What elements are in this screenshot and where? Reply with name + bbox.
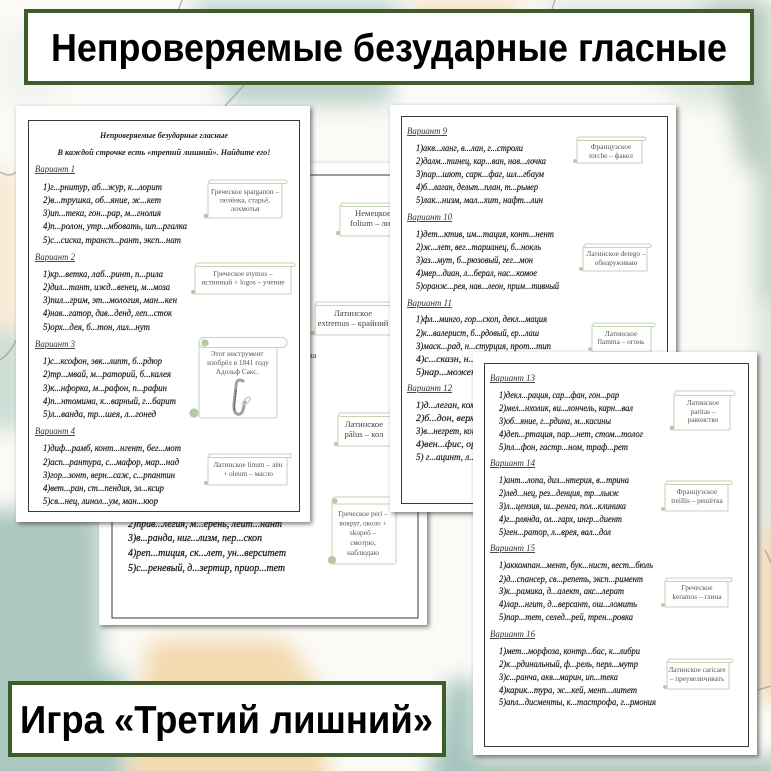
variant 1: 1)г...рнитур, аб...жур, к...лорит	[43, 182, 162, 192]
variant 15: 4)лар...нгит, д...версант, ош...ломить	[499, 599, 637, 609]
variant 11: 3)маск...рад, н...стурция, прот...тип	[415, 341, 551, 351]
callout: caricare: – преувеличивать	[669, 674, 725, 683]
variant 9: 1)акв...ланг, в...лан, г...строли	[416, 143, 523, 153]
callout: etymos	[191, 263, 295, 294]
variant 3: 5)л...ванда, тр...шея, л...гонед	[43, 409, 156, 419]
variant 2: 5)орх...дея, б...тон, лил...нут	[43, 322, 150, 332]
variant 3: 3)к...нфорка, м...рафон, п...рафин	[42, 383, 167, 393]
variant 10: Вариант 10	[407, 212, 452, 222]
variant 15: 1)аккомпан...мент, бук...нист, вест...бюль	[499, 560, 653, 570]
variant 1	[35, 164, 187, 245]
variant 16: Вариант 16	[490, 629, 535, 639]
callout: extremus: Латинское	[334, 308, 372, 318]
variant 15: 2)д...спансер, св...репеть, эксп...римент	[499, 574, 643, 584]
variant 12: 1)д...леган, ком	[416, 400, 476, 410]
variant 12: 4)вен...фис, ор	[416, 439, 476, 449]
callout: saxophone: Этот инструмент	[211, 349, 264, 358]
variant 13: 2)мел...нхолик, ви...лончель, карн...вал	[499, 403, 633, 413]
callout: treillis: Французское	[677, 487, 717, 496]
variant 16: 1)мет...морфоза, контр...бас, к...либри	[499, 646, 640, 656]
callout: peri: вокруг, около +	[339, 518, 387, 528]
exercise lines	[127, 518, 286, 574]
callout: flamma: Латинское	[605, 329, 637, 338]
callout: treillis	[661, 481, 732, 511]
title text: Непроверяемые безударные гласные	[51, 27, 727, 70]
variant 10: 3)аз...мут, б...рюзовый, гег...мон	[415, 255, 533, 265]
variant 2: 3)пил...грим, эт...мология, ман...кен	[42, 295, 177, 305]
worksheet title: Непроверяемые безударные гласные	[99, 130, 228, 140]
callout: keramos: Греческое	[682, 583, 712, 592]
variant 3: 4)п...нтомима, к...варный, г...барит	[43, 396, 176, 406]
variant 14	[490, 458, 629, 537]
panel: worksheet page 3	[390, 105, 676, 512]
variant 2	[35, 252, 177, 332]
game name banner	[10, 683, 444, 755]
variant 16: 3)с...ранча, акв...марин, ип...тека	[498, 672, 618, 682]
variant 4: 4)вет...ран, ст...пендия, эл...ксир	[43, 483, 164, 493]
variant 9: 5)лак...низм, мал...хит, нафт...лин	[416, 195, 543, 205]
variant 1: 3)ип...тека, гон...рар, м...гнолия	[42, 208, 161, 218]
variant 11: 1)фл...минго, гор...скоп, декл...мация	[416, 314, 547, 324]
variant 12: 5) г...ацинт, л...	[416, 452, 476, 462]
callout: extremus	[311, 302, 396, 335]
variant 11: Вариант 11	[407, 298, 452, 308]
variant 3: 1)с...ксофон, эвк...липт, б...рдюр	[43, 356, 162, 366]
callout: caricare	[663, 659, 733, 689]
variant 12: 2)б...дон, верм	[416, 413, 476, 423]
callout: detego	[579, 244, 651, 271]
callout: caricare: Латинское caricare	[668, 665, 726, 674]
callout: peri: skopeō –	[350, 528, 376, 537]
variant 11: 4)с...сказн, н...	[416, 354, 476, 364]
variant 2: 1)кр...ветка, лаб...ринт, п...рила	[43, 269, 163, 279]
variant 3: Вариант 3	[35, 339, 75, 349]
callout: sparganon: лохмотья	[231, 204, 260, 213]
exercise lines: 4)реп...тиция, ск...лет, ун...верситет	[128, 547, 286, 559]
panel: worksheet page 1	[16, 106, 310, 522]
variant 3	[35, 339, 176, 419]
callout: etymos: истинный + logos – учение	[201, 278, 285, 286]
callout: keramos	[661, 578, 732, 607]
variant 14: 4)г...рлянда, ол...гарх, ингр...диент	[499, 514, 622, 524]
variant 15: 5)пар...тет, селед...рей, трен...ровка	[499, 612, 633, 622]
callout: keramos: keramos – глина	[672, 592, 722, 601]
variant 2: 4)нав...гатор, див...денд, леп...сток	[43, 308, 173, 318]
variant 13: 1)декл...рация, сар...фан, гон...рар	[499, 390, 619, 400]
callout: palus	[334, 413, 394, 446]
callout: detego: обнаруживаю	[595, 258, 638, 267]
variant 2: Вариант 2	[35, 252, 75, 262]
variant 16	[490, 629, 656, 707]
variant 10	[407, 212, 559, 291]
variant 15	[490, 543, 653, 622]
callout: folium: folium – лист	[350, 218, 398, 228]
callout: linum: + oleum – масло	[223, 469, 273, 478]
variant 2: 2)дил...тант, ижд...венец, м...моза	[43, 282, 170, 292]
callout: torche: torche – факел	[589, 151, 633, 160]
callout: sparganon: Греческое sparganon –	[211, 187, 279, 196]
variant 13: Вариант 13	[490, 373, 535, 383]
variant 9: 4)б...лаган, дельт...план, т...рьмер	[416, 182, 538, 192]
callout: paritas: Латинское	[687, 398, 719, 407]
text fragment: ма	[307, 350, 317, 360]
callout: etymos: Греческое etymos –	[213, 269, 273, 278]
callout: palus: pālus – кол	[345, 429, 384, 439]
callout: linum	[204, 454, 291, 485]
panel: worksheet page 4	[473, 352, 757, 755]
variant 15: Вариант 15	[490, 543, 535, 553]
worksheet instruction: В каждой строчке есть «третий лишний». Найдите его!	[57, 147, 270, 157]
panel: worksheet page behind	[99, 163, 427, 625]
variant 14: 1)ант...лопа, диз...нтерия, в...трина	[499, 475, 629, 485]
variant 4: 1)диф...рамб, конт...нгент, бег...мот	[43, 443, 181, 453]
callout: saxophone: Адольф Сакс.	[216, 367, 258, 376]
callout: linum: Латинское linum – лён	[213, 460, 283, 469]
callout: paritas: paritas –	[691, 407, 716, 416]
variant 13: 3)об...яние, г...рдина, м...касины	[498, 416, 611, 426]
variant 3: 2)тр...мвай, м...раторий, б...калея	[43, 369, 171, 379]
variant 14: 3)л...цензия, ш...ренга, пол...клиника	[498, 501, 626, 511]
variant 13: 5)пл...фон, гастр...ном, траф...рет	[499, 442, 628, 452]
callout: flamma	[588, 323, 655, 352]
variant 16: 4)карик...тура, ж...кей, менп...литет	[499, 685, 637, 695]
variant 13	[490, 373, 643, 452]
variant 16: 5)апл...дисменты, к...тастрофа, г...рмония	[499, 697, 656, 707]
variant 9: 2)далм...тинец, кар...ван, нав...лочка	[416, 156, 546, 166]
variant 12: 3)в...негрет, кон	[415, 426, 476, 436]
variant 11: 2)к...валерист, б...рдовый, ер...лаш	[416, 328, 539, 338]
callout: treillis: treillis – решётка	[671, 496, 724, 505]
variant 10: 5)оранж...рея, нав...леон, прим...тивный	[416, 281, 559, 291]
exercise lines: 3)в...ранда, ниг...лизм, пер...скоп	[127, 532, 262, 544]
callout: extremus: extremus – крайний	[318, 318, 389, 328]
variant 1: 4)п...ролон, утр...мбовать, шп...ргалка	[43, 221, 187, 231]
variant 13: 4)деп...ртация, пар...нет, стом...толог	[499, 429, 643, 439]
title banner	[26, 11, 752, 83]
callout: sparganon: пелёнка, старьё,	[220, 196, 270, 204]
variant 10: 2)ж...лет, вег...тарианец, б...нокль	[416, 242, 541, 252]
callout: peri: Греческое peri –	[338, 509, 388, 518]
variant 9: 3)пар...шют, сарк...фаг, шл...гбаум	[415, 169, 544, 179]
callout: sparganon	[204, 180, 287, 218]
variant 15: 3)к...рамика, д...алект, акс...лерат	[498, 586, 624, 596]
variant 14: 5)ген...ратор, л...врея, вал...дол	[499, 527, 611, 537]
variant 1: Вариант 1	[35, 164, 75, 174]
variant 9: Вариант 9	[407, 126, 447, 136]
callout: folium: Немецкое	[355, 208, 391, 218]
callout: palus: Латинское	[345, 419, 383, 429]
variant 4: 2)асп...рантура, с...мафор, мар...над	[43, 457, 179, 467]
callout: peri: смотрю,	[350, 538, 376, 547]
variant 9	[407, 126, 546, 205]
callout: torche: Французское	[591, 142, 631, 151]
variant 1: 5)с...сиска, трансп...рант, эксп...нат	[43, 235, 181, 245]
callout: peri: наблюдаю	[347, 548, 379, 557]
variant 14: 2)лед...нец, рез...денция, тр...льяж	[499, 488, 619, 498]
callout: detego: Латинское detego –	[586, 249, 646, 258]
callout: paritas: равенство	[688, 415, 719, 424]
variant 4	[35, 426, 181, 506]
callout: paritas	[670, 391, 735, 430]
variant 4: 5)св...нец, линол...ум, ман...кюр	[43, 496, 158, 506]
variant 11	[407, 298, 551, 377]
game name text: Игра «Третий лишний»	[20, 699, 433, 742]
variant 16: 2)к...рдинальный, ф...рель, перл...мутр	[499, 659, 638, 669]
callout: saxophone: изобрёл в 1841 году	[207, 358, 269, 367]
callout: torche	[573, 137, 646, 163]
callout: peri	[328, 497, 398, 564]
callout: saxophone	[190, 338, 287, 418]
exercise lines: 5)с...реневый, д...зертир, приор...тет	[128, 562, 285, 574]
variant 1: 2)в...трушка, об...яние, ж...кет	[43, 195, 161, 205]
exercise lines: 2)прив...легия, м...ерень, лейт...нант	[128, 518, 282, 530]
variant 10: 1)дет...ктив, им...тация, конт...нент	[416, 229, 554, 239]
icon: saxophone	[234, 380, 250, 414]
variant 12: Вариант 12	[407, 383, 452, 393]
callout: folium	[336, 203, 401, 236]
variant 12	[407, 383, 476, 462]
callout: flamma: flamma – огонь	[598, 337, 645, 346]
variant 4: Вариант 4	[35, 426, 75, 436]
variant 11: 5)нар...можен	[416, 367, 476, 377]
variant 10: 4)мер...диан, л...берал, нас...комое	[416, 268, 537, 278]
variant 4: 3)гор...зонт, верн...саж, с...рпантин	[42, 470, 175, 480]
variant 14: Вариант 14	[490, 458, 535, 468]
